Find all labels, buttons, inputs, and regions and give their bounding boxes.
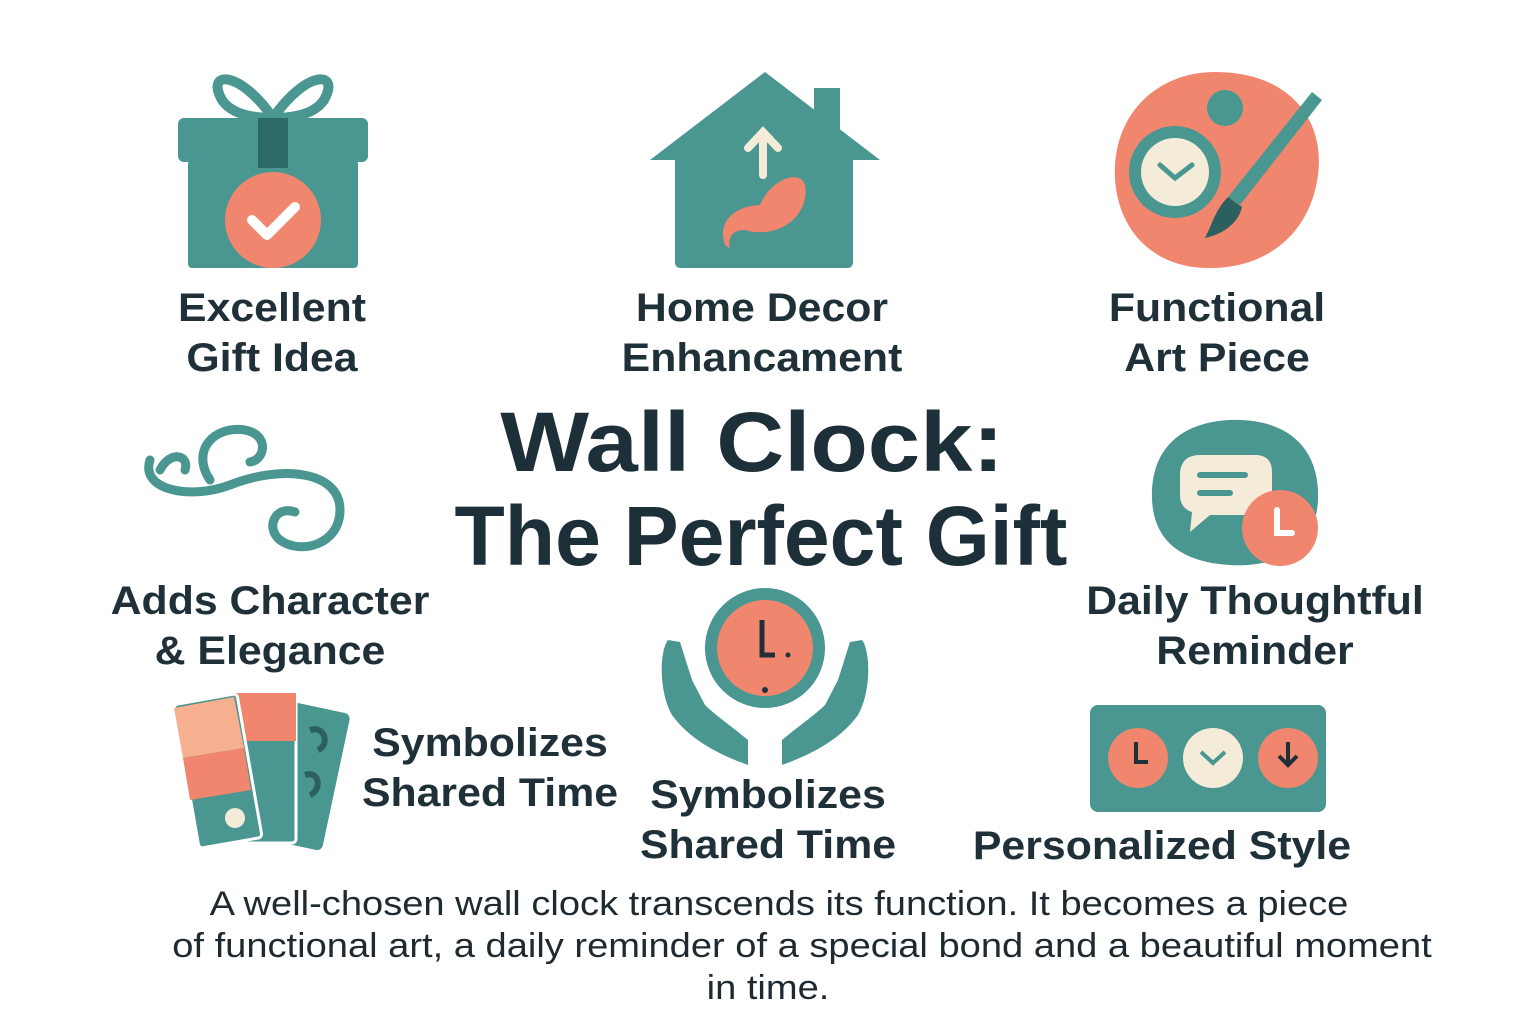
paragraph: A well-chosen wall clock transcends its function. It becomes a piece [210, 885, 1348, 923]
title: The Perfect Gift [455, 489, 1067, 583]
heading: Symbolizes Shared Time (left): Symbolizes [372, 721, 608, 765]
paragraph: of functional art, a daily reminder of a special bond and a beautiful moment [172, 927, 1432, 965]
heading: Personalized Style: Personalized Style [973, 824, 1351, 868]
heading: Excellent Gift Idea: Excellent [178, 286, 366, 330]
heading: Home Decor Enhancament: Home Decor [636, 286, 888, 330]
heading: Functional Art Piece [1109, 286, 1325, 380]
heading: Functional Art Piece: Functional [1109, 286, 1325, 330]
heading: Excellent Gift Idea [178, 286, 366, 380]
heading: Daily Thoughtful Reminder [1086, 579, 1424, 673]
heading: Daily Thoughtful Reminder: Daily Thoughtful [1086, 579, 1424, 623]
heading: Symbolizes Shared Time (left) [362, 721, 618, 815]
heading: Adds Character & Elegance: Adds Character [111, 579, 429, 623]
heading: Excellent Gift Idea: Gift Idea [186, 336, 358, 380]
heading: Daily Thoughtful Reminder: Reminder [1156, 629, 1354, 673]
heading: Symbolizes Shared Time (center) [640, 773, 896, 867]
heading: Home Decor Enhancament [622, 286, 902, 380]
title: Wall Clock: [500, 395, 1004, 489]
heading: Functional Art Piece: Art Piece [1124, 336, 1310, 380]
heading: Symbolizes Shared Time (left): Shared Time [362, 771, 618, 815]
heading: Symbolizes Shared Time (center): Shared Time [640, 823, 896, 867]
paragraph: in time. [707, 969, 829, 1007]
heading: Symbolizes Shared Time (center): Symbolizes [650, 773, 886, 817]
title [455, 395, 1067, 583]
paragraph [172, 885, 1432, 1007]
heading: Adds Character & Elegance [111, 579, 429, 673]
heading: Home Decor Enhancament: Enhancament [622, 336, 902, 380]
heading: Adds Character & Elegance: & Elegance [155, 629, 385, 673]
